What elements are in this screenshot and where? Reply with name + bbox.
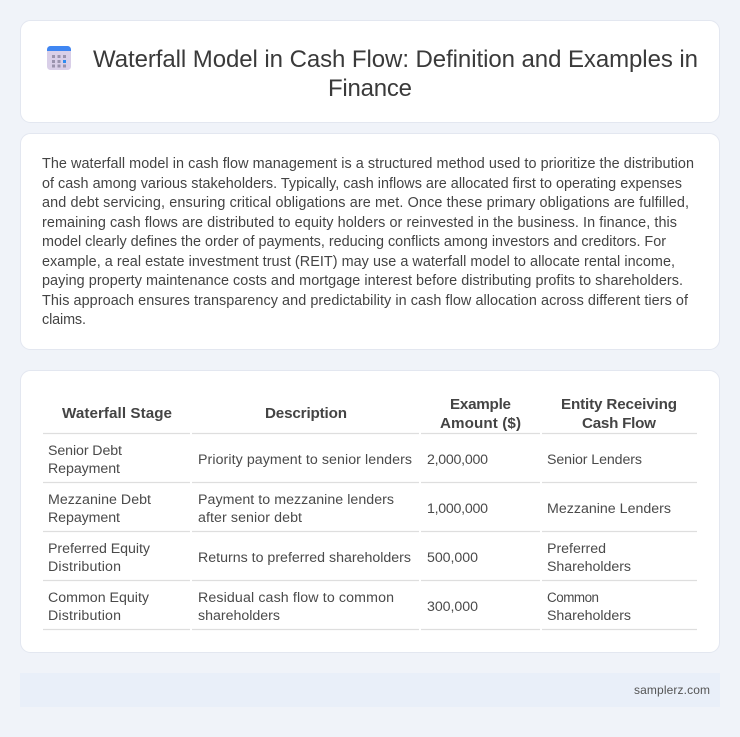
title [93, 46, 698, 102]
table row: senior debt: Repayment [48, 461, 120, 477]
footer bar [20, 673, 720, 707]
text block: paragraph: This approach ensures transparency and predictability in cash flow allocation across different tiers of [42, 293, 689, 309]
table row: common equity: shareholders [198, 608, 280, 624]
table row: preferred equity: 500,000 [427, 550, 478, 566]
footer text: samplerz.com [634, 683, 710, 697]
table row: common equity: Common Equity [48, 590, 150, 606]
table header [43, 396, 697, 434]
panel: intro paragraph [20, 134, 720, 350]
table header: Description [265, 405, 347, 422]
text block: paragraph: and debt servicing, ensuring critical obligations are met. Once these primary obligations are fulfilled, [42, 195, 689, 211]
table row: senior debt: Senior Debt [48, 443, 122, 459]
table row: common equity: Residual cash flow to common [198, 590, 394, 606]
text block: paragraph: of cash among various stakeholders. Typically, cash inflows are allocated first to operating expenses [42, 176, 682, 192]
text block: paragraph: model clearly defines the order of payments, reducing conflicts among investors and creditors. For [42, 234, 666, 250]
panel: header [20, 20, 720, 122]
table header: Waterfall Stage [62, 405, 172, 422]
table row: common equity: Shareholders [547, 608, 631, 624]
table header: Example [450, 396, 511, 413]
table row: mezzanine debt [43, 492, 697, 532]
table row: common equity: 300,000 [427, 599, 478, 615]
text block: paragraph: example, a real estate investment trust (REIT) may use a waterfall model to allocate rental income, [42, 254, 675, 270]
table row: senior debt: Senior Lenders [547, 452, 642, 468]
text block: paragraph [42, 156, 694, 328]
text block: paragraph: paying property maintenance costs and mortgage interest before distributing profits to shareholders. [42, 273, 683, 289]
table row: preferred equity: Returns to preferred shareholders [198, 550, 411, 566]
table row: preferred equity: Shareholders [547, 559, 631, 575]
table row: mezzanine debt: 1,000,000 [427, 501, 488, 517]
title: Finance [328, 75, 412, 102]
table row: senior debt: 2,000,000 [427, 452, 488, 468]
text block: paragraph: The waterfall model in cash flow management is a structured method used to prioritize the distribution [42, 156, 694, 172]
table row: common equity [43, 590, 697, 630]
table row: mezzanine debt: Repayment [48, 510, 120, 526]
table row: common equity: Distribution [48, 608, 121, 624]
title: Waterfall Model in Cash Flow: Definition and Examples in [93, 46, 698, 73]
table row: mezzanine debt: after senior debt [198, 510, 302, 526]
table header: Amount ($) [440, 415, 521, 432]
table row: mezzanine debt: Mezzanine Debt [48, 492, 151, 508]
table header: Entity Receiving [561, 396, 677, 413]
table row: senior debt: Priority payment to senior lenders [198, 452, 412, 468]
table row: mezzanine debt: Payment to mezzanine lenders [198, 492, 394, 508]
table row: senior debt [43, 443, 697, 482]
icon: calendar [47, 46, 71, 70]
table row: preferred equity: Preferred [547, 541, 606, 557]
text block: paragraph: remaining cash flows are distributed to equity holders or reinvested in the business. In finance, this [42, 215, 677, 231]
table row: common equity: Common [547, 590, 599, 605]
table row: preferred equity: Preferred Equity [48, 541, 151, 557]
panel: table [20, 370, 720, 652]
table header: Cash Flow [582, 415, 656, 432]
table row: preferred equity: Distribution [48, 559, 121, 575]
text block: paragraph: claims. [42, 312, 86, 328]
table row: preferred equity [43, 541, 697, 580]
table row: mezzanine debt: Mezzanine Lenders [547, 501, 671, 517]
